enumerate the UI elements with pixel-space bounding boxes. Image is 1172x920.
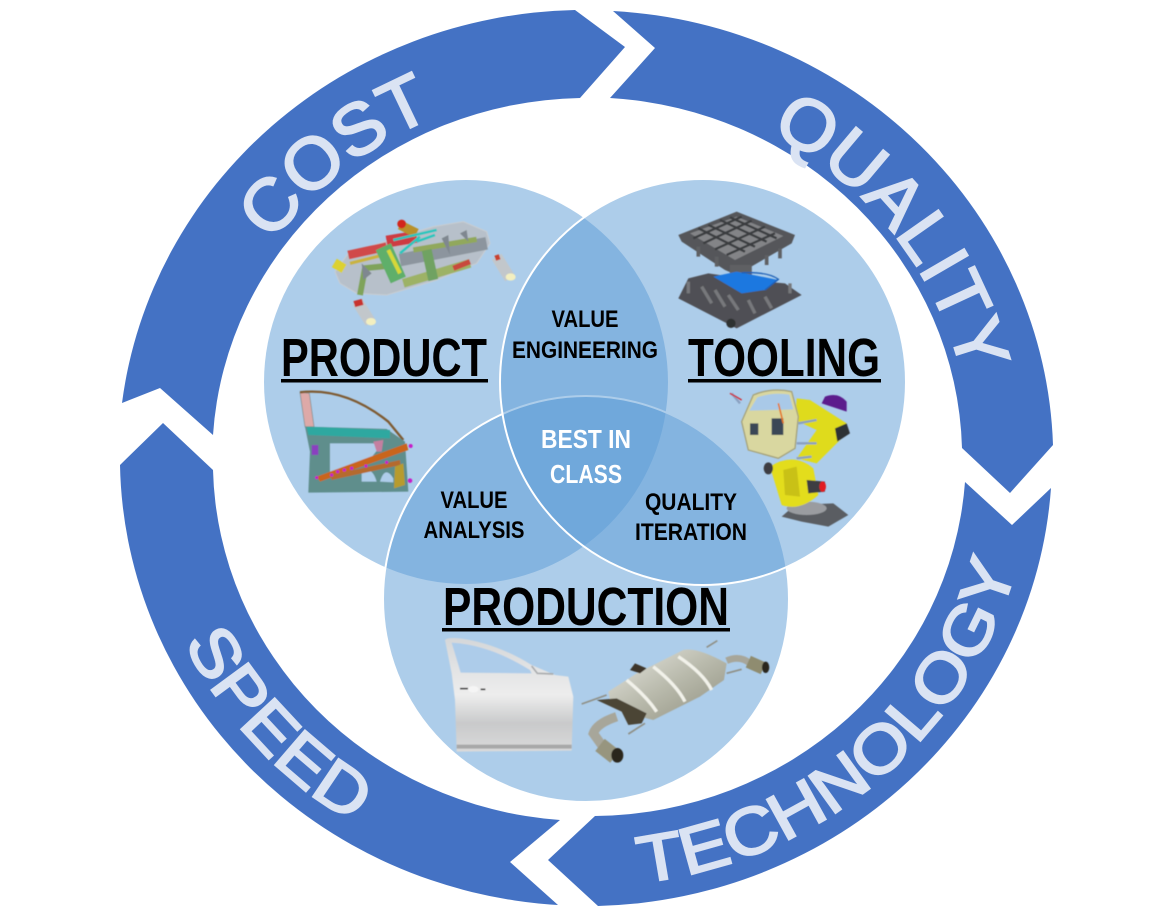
label: speed: SPEED: [190, 628, 368, 814]
illustration: robot arm: [730, 390, 850, 527]
illustration: door panel: [445, 638, 573, 752]
text: value analysis: ANALYSIS: [424, 517, 524, 544]
text: best in class: CLASS: [550, 459, 622, 489]
heading: tooling: TOOLING: [688, 328, 880, 388]
text: value engineering: ENGINEERING: [512, 337, 658, 364]
arrow: speed: [120, 423, 560, 905]
text: value engineering: [512, 306, 658, 364]
text: best in class: BEST IN: [541, 424, 631, 454]
heading: production: PRODUCTION: [443, 577, 729, 637]
text: quality iteration: ITERATION: [635, 519, 747, 546]
illustration: stamping die: [678, 212, 802, 328]
text: value analysis: VALUE: [440, 487, 508, 514]
arrow: quality: [610, 11, 1053, 493]
illustration: finished muffler: [582, 641, 769, 763]
label: cost: COST: [244, 70, 418, 232]
illustration: muffler simulation: [335, 220, 516, 325]
label: technology: TECHNOLOGY: [634, 552, 1012, 882]
arrow: cost: [122, 10, 625, 435]
heading: product: PRODUCT: [281, 328, 487, 388]
text: quality iteration: [635, 489, 747, 546]
illustration: door structure: [300, 392, 413, 493]
arrow: technology: [548, 482, 1051, 906]
venn circle: tooling: [500, 179, 906, 585]
text: value analysis: [424, 487, 524, 544]
label: quality: QUALITY: [780, 98, 1012, 360]
text: quality iteration: QUALITY: [645, 489, 737, 516]
text: best in class: [541, 424, 631, 489]
text: value engineering: VALUE: [552, 306, 618, 333]
venn circle: production: [383, 396, 789, 802]
venn circle: product: [264, 180, 668, 584]
